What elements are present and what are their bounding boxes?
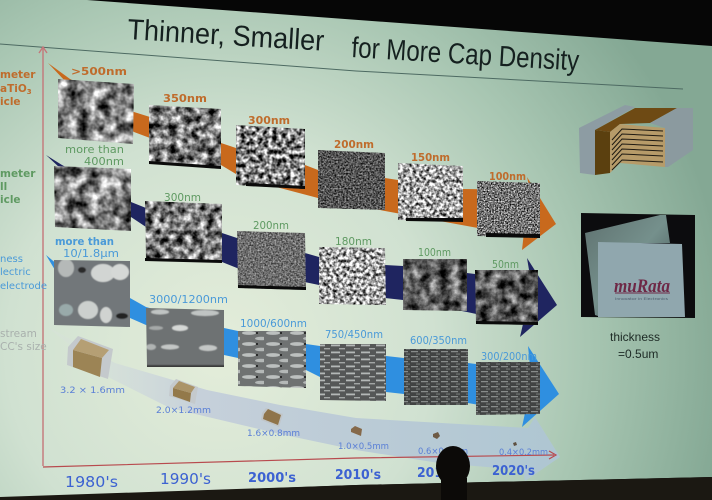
icon: multilayer capacitor cutaway	[579, 105, 693, 175]
blue size labels: 600/350nm	[410, 334, 467, 347]
chip: 1.6x0.8mm	[261, 408, 283, 427]
navy trend arrow	[46, 155, 557, 337]
vertical axis arrow	[39, 47, 47, 466]
photo: layers 1980s	[54, 260, 130, 327]
photo: layers 2000s	[238, 331, 306, 388]
chip size labels: 3.2 × 1.6mm	[60, 385, 125, 396]
title: for More Cap Density	[351, 32, 580, 78]
label: Ni particle: icle	[0, 194, 21, 206]
panel: particle photos row 2	[54, 166, 538, 325]
caption: thickness: thickness	[610, 330, 660, 344]
decade axis labels: 1980's	[65, 473, 118, 491]
green size labels: 180nm	[335, 236, 372, 248]
blue size labels: 10/1.8μm	[63, 247, 119, 260]
label: thickness of dielectric and electrode: ness	[0, 254, 23, 265]
chip: 3.2x1.6mm	[67, 336, 113, 379]
logo: muRata: muRata	[614, 276, 670, 297]
orange trend arrow	[48, 63, 556, 250]
blue size labels: 1000/600nm	[240, 317, 307, 330]
blue size labels: more than	[55, 235, 114, 248]
photo: layers 2015s	[404, 349, 468, 405]
label: mainstream MLCC size: stream	[0, 328, 37, 340]
photo: Ni 1990s	[145, 201, 222, 262]
decade axis labels: 2015's	[417, 465, 463, 481]
label: BaTiO3 particle: meter	[0, 69, 36, 81]
photo: BaTiO3 1990s	[149, 105, 221, 169]
photo: layers 2020s	[476, 362, 540, 415]
green size labels: 200nm	[253, 220, 289, 232]
chip size labels	[60, 385, 548, 458]
blue trend arrow	[46, 255, 559, 427]
orange size labels: >500nm	[71, 65, 127, 78]
orange size labels: 150nm	[411, 151, 450, 164]
photo: layers 1990s	[146, 308, 224, 367]
orange size labels	[71, 65, 526, 183]
title	[127, 14, 580, 78]
chip: 2.0x1.2mm	[169, 379, 198, 404]
audience member head silhouette	[436, 446, 470, 500]
chip size labels: 0.4×0.2mm	[499, 447, 548, 458]
decade axis labels: 2000's	[248, 470, 296, 486]
photo: BaTiO3 2015s	[398, 163, 463, 221]
photo: Ni 1980s	[54, 166, 131, 231]
decade axis labels	[65, 463, 535, 491]
green size labels: 50nm	[492, 259, 519, 271]
label: BaTiO3 particle: aTiO	[0, 83, 32, 96]
chip: 0.6x0.3mm	[433, 432, 440, 439]
blue size labels: 750/450nm	[325, 328, 383, 341]
orange size labels: 200nm	[334, 138, 374, 151]
green size labels: 100nm	[418, 247, 451, 259]
chip: 0.4x0.2mm	[513, 442, 517, 446]
green size labels: more than	[65, 144, 124, 156]
decade axis labels: 2020's	[492, 463, 535, 479]
caption: thickness: =0.5um	[618, 347, 658, 361]
photo: Murata thin sheet	[581, 213, 695, 318]
bottom dark wall	[0, 477, 712, 500]
photo: BaTiO3 1980s	[58, 79, 134, 144]
photo: BaTiO3 2000s	[236, 125, 305, 189]
blue size labels	[55, 235, 537, 363]
logo tagline: Innovator in Electronics	[615, 297, 668, 301]
blue size labels: 3000/1200nm	[149, 293, 228, 306]
label: thickness of dielectric and electrode: electrode	[0, 281, 47, 292]
photo: Ni 2000s	[237, 231, 306, 290]
green size labels: 300nm	[164, 192, 201, 204]
label: mainstream MLCC size: CC's size	[0, 341, 47, 353]
photo: BaTiO3 2010s	[318, 150, 385, 210]
photo scale bars row 2	[145, 258, 538, 325]
chip size labels: 0.6×0.3mm	[418, 446, 468, 457]
chip size labels: 2.0×1.2mm	[156, 405, 211, 416]
orange size labels: 100nm	[489, 170, 526, 183]
photo: Ni 2015s	[403, 259, 467, 311]
panel: layer cross-section photos row 3	[50, 255, 540, 415]
photo scale bars row 1	[149, 161, 540, 238]
chip: 1.0x0.5mm	[351, 426, 362, 436]
left row labels	[0, 69, 47, 353]
photo: Ni 2020s	[475, 270, 538, 325]
green size labels: 400nm	[84, 156, 124, 168]
green size labels	[65, 144, 519, 271]
panel: particle photos row 1	[58, 79, 540, 238]
chip size labels: 1.6×0.8mm	[247, 428, 300, 439]
orange size labels: 300nm	[248, 114, 290, 127]
label: Ni particle: meter	[0, 168, 36, 180]
decade axis labels: 2010's	[335, 467, 381, 483]
label: thickness of dielectric and electrode: lectric	[0, 267, 31, 278]
photo: Ni 2010s	[319, 247, 386, 305]
decade axis labels: 1990's	[160, 470, 211, 488]
photo: BaTiO3 2020s	[477, 181, 540, 238]
label: BaTiO3 particle: icle	[0, 96, 21, 108]
label: Ni particle: ll	[0, 181, 7, 193]
blue size labels: 300/200nm	[481, 350, 537, 363]
orange size labels: 350nm	[163, 92, 207, 105]
horizontal axis arrow	[43, 451, 556, 467]
chip size labels: 1.0×0.5mm	[338, 441, 389, 452]
label: BaTiO3 particle: 3	[27, 88, 32, 96]
photo: layers 2010s	[320, 344, 386, 401]
pale chip size arrow	[46, 326, 560, 481]
title: Thinner, Smaller	[127, 14, 325, 58]
